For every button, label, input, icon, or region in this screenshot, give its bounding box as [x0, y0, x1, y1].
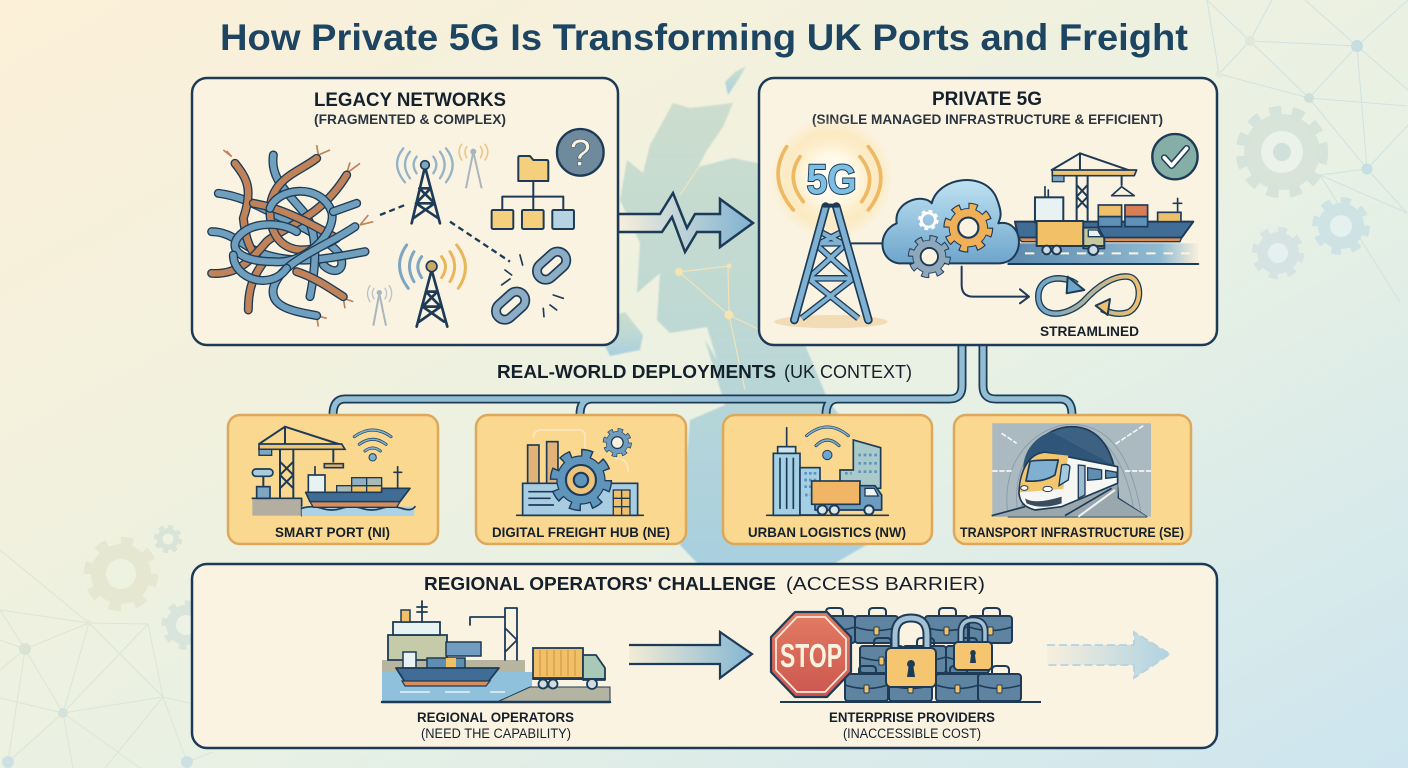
icon: city buildings [773, 428, 881, 515]
icon: factory with gears [517, 430, 643, 515]
background map of the UK [593, 66, 880, 566]
heading: legacy networks: LEGACY NETWORKS [314, 89, 506, 111]
icon: 5G tower [770, 117, 893, 328]
heading: challenge: (ACCESS BARRIER) [780, 573, 985, 594]
icon: train in tunnel [992, 423, 1151, 517]
icon: tower with yellow signal [400, 245, 465, 327]
card: smart port [228, 415, 438, 544]
subheading: single managed infrastructure: (SINGLE MANAGED INFRASTRUCTURE & EFFICIENT) [812, 111, 1163, 127]
heading: private 5G: PRIVATE 5G [932, 88, 1042, 110]
label: URBAN LOGISTICS (NW) [748, 524, 906, 540]
icon: harbour scene [382, 601, 610, 702]
icon: truck [1037, 221, 1104, 255]
arrow: operators to barrier [629, 632, 752, 678]
heading: real-world deployments: (UK CONTEXT) [779, 361, 912, 382]
icon: briefcases behind barrier [780, 608, 1041, 702]
icon: radar [252, 469, 273, 498]
map network links [675, 165, 760, 390]
card: urban logistics [723, 415, 932, 544]
icon: tangled cables [212, 145, 373, 327]
icon: container ship [1015, 187, 1193, 242]
icon: check badge [1152, 134, 1198, 179]
icon: tower with signal [397, 148, 453, 223]
panel: private 5G [759, 78, 1217, 345]
sublabel: inaccessible cost: (INACCESSIBLE COST) [843, 726, 981, 741]
icon: stop sign [771, 612, 851, 697]
icon: broken chain [492, 248, 570, 323]
icon: faint tower bottom [367, 286, 392, 326]
background gears top right [1242, 112, 1365, 275]
card: digital freight hub [476, 415, 686, 544]
icon: question mark [557, 129, 604, 176]
arrow: legacy to private 5G [618, 193, 753, 252]
icon: stop sign: STOP [780, 637, 842, 674]
card: transport infrastructure [954, 415, 1191, 544]
heading: real-world deployments: REAL-WORLD DEPLOYMENTS [497, 361, 776, 382]
label: regional operators: REGIONAL OPERATORS [417, 710, 574, 725]
arrow: dashed fading [1047, 632, 1170, 678]
icon: crane [252, 427, 345, 516]
icon: cargo ship [302, 467, 415, 516]
heading: challenge: REGIONAL OPERATORS' CHALLENGE [424, 573, 776, 594]
subheading: fragmented and complex: (FRAGMENTED & COMPLEX) [314, 111, 506, 127]
background network top right [1207, 0, 1408, 302]
icon: faint tower top [459, 144, 488, 188]
icon: delivery truck [767, 481, 888, 515]
dashed links [380, 204, 510, 262]
label: TRANSPORT INFRASTRUCTURE (SE) [960, 524, 1184, 540]
icon: padlocks [886, 618, 992, 687]
sublabel: need the capability: (NEED THE CAPABILITY) [421, 726, 571, 741]
icon: cloud with gears [882, 180, 1019, 274]
arrow to streamlined [962, 267, 1029, 303]
label: enterprise providers: ENTERPRISE PROVIDERS [829, 710, 995, 725]
icon: 5G tower: 5G [807, 155, 857, 202]
road [1008, 243, 1198, 264]
icon: wifi [354, 430, 391, 461]
icon: crane [1052, 153, 1137, 220]
icon: infinity loop [1038, 276, 1139, 315]
icon: question mark: ? [570, 132, 591, 174]
label: SMART PORT (NI) [275, 524, 390, 540]
label: streamlined: STREAMLINED [1040, 323, 1139, 339]
label: DIGITAL FREIGHT HUB (NE) [492, 524, 670, 540]
background gears bottom left [90, 527, 207, 646]
panel: regional operators' challenge [192, 564, 1217, 748]
panel: legacy networks [192, 78, 618, 345]
connectors from Private 5G to deployments [333, 345, 1072, 415]
background network bottom left [0, 550, 213, 768]
icon: wifi [807, 427, 848, 460]
icon: folder hierarchy [492, 156, 574, 229]
title: How Private 5G Is Transforming UK Ports and Freight [220, 17, 1188, 58]
